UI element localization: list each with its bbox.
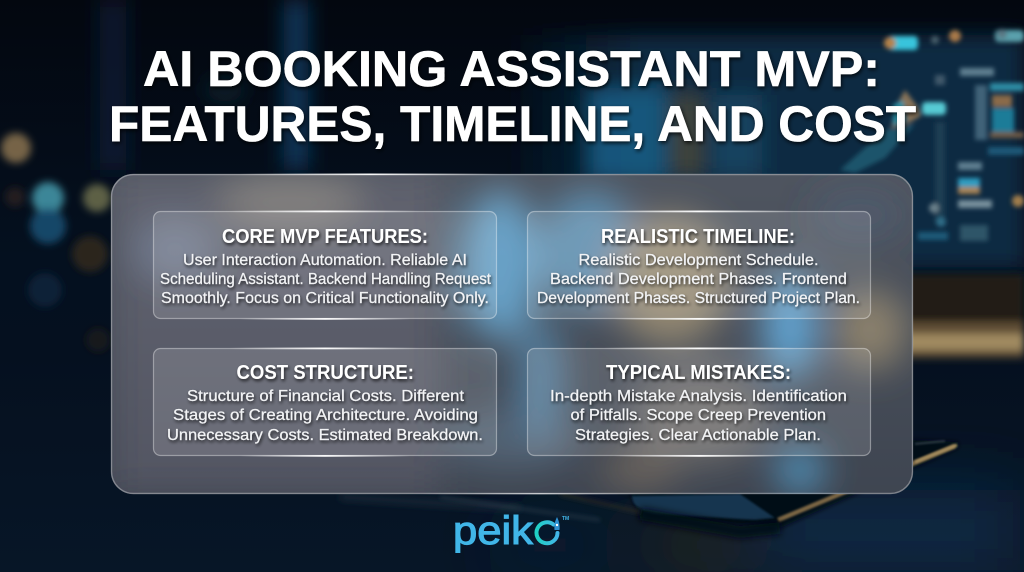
body: cost structure: Structure of Financial Costs. Different [187, 388, 465, 405]
title: FEATURES, TIMELINE, AND COST [109, 96, 916, 152]
heading: cost structure: COST STRUCTURE: [236, 361, 414, 384]
title: AI BOOKING ASSISTANT MVP: [143, 41, 880, 97]
body: core mvp features: Smoothly. Focus on Critical Functionality Only. [161, 290, 489, 307]
body: realistic timeline [537, 252, 860, 307]
background: desk lower glow [490, 490, 1020, 570]
trademark: TM [562, 516, 569, 522]
card: core mvp features [154, 210, 496, 320]
body: realistic timeline: Development Phases. Structured Project Plan. [537, 290, 860, 307]
body: core mvp features: Scheduling Assistant. Backend Handling Request [160, 271, 492, 288]
background: monitor dashboard details [840, 29, 1024, 241]
logo: peiko: peik [453, 509, 534, 553]
body: typical mistakes [550, 388, 847, 444]
heading: realistic timeline: REALISTIC TIMELINE: [601, 225, 795, 248]
body: realistic timeline: Realistic Development Schedule. [578, 252, 818, 269]
title [109, 41, 916, 152]
body: realistic timeline: Backend Development Phases. Frontend [550, 271, 847, 288]
body: typical mistakes: In-depth Mistake Analysis. Identification [550, 388, 847, 405]
body: core mvp features [160, 252, 492, 307]
card: cost structure [154, 348, 496, 457]
icon: rocket [554, 517, 560, 530]
body: core mvp features: User Interaction Automation. Reliable AI [183, 252, 467, 269]
body: cost structure: Unnecessary Costs. Estimated Breakdown. [167, 427, 483, 444]
card: typical mistakes [528, 348, 870, 457]
logo: peiko [453, 509, 569, 553]
background: phone silhouette [340, 440, 958, 532]
body: typical mistakes: Strategies. Clear Actionable Plan. [575, 427, 821, 444]
body: cost structure: Stages of Creating Architecture. Avoiding [173, 407, 478, 424]
body: cost structure [167, 388, 483, 444]
background: left bokeh lights [1, 133, 111, 352]
background: vertical light bands [100, 0, 308, 170]
card: realistic timeline [528, 210, 870, 320]
glass panel [111, 172, 913, 494]
icon: logo ring letter o [537, 522, 558, 543]
heading: typical mistakes: TYPICAL MISTAKES: [606, 361, 791, 384]
background: warm desk edge [900, 274, 1024, 358]
heading: core mvp features: CORE MVP FEATURES: [222, 225, 428, 248]
background: monitor glow [510, 35, 1024, 267]
body: typical mistakes: of Pitfalls. Scope Creep Prevention [570, 407, 826, 424]
